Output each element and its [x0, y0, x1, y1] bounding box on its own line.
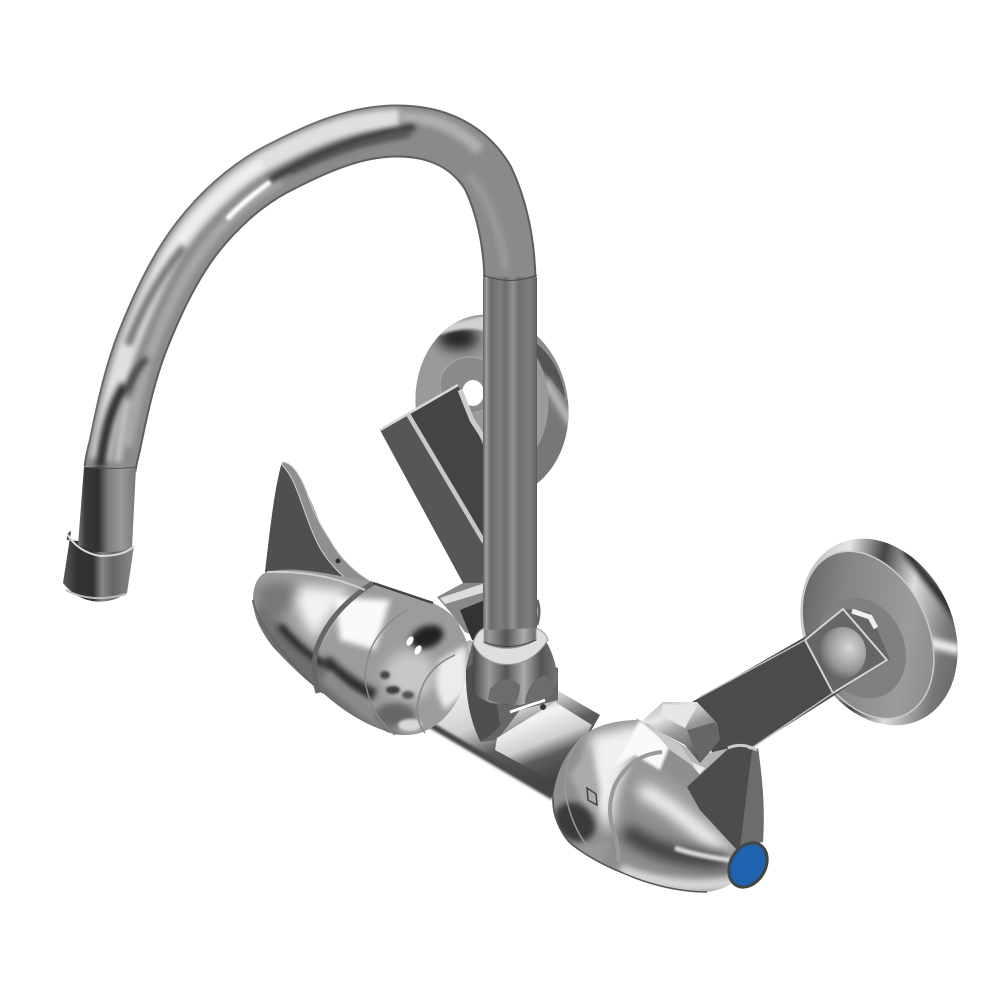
right wall flange — [800, 538, 958, 726]
left lever handle — [265, 462, 375, 590]
right valve neck under nut — [636, 718, 730, 795]
right valve hex nut — [643, 702, 720, 768]
right mounting arm — [692, 609, 890, 760]
centre tee fitting — [466, 640, 592, 785]
left valve body — [252, 570, 470, 736]
main body tube — [417, 640, 600, 797]
spout lower section — [67, 467, 136, 556]
spout nozzle — [63, 531, 134, 602]
right valve body — [547, 720, 740, 892]
rear mounting bracket — [380, 385, 485, 585]
spout — [100, 117, 510, 469]
rear hex nut behind riser — [437, 583, 485, 640]
rear wall flange — [415, 314, 569, 484]
right lever handle — [687, 745, 764, 850]
vertical riser — [483, 275, 539, 642]
riser collar — [472, 628, 558, 705]
illustration: chrome wall-mounted faucet — [63, 104, 958, 893]
icon: blue cold-water indicator — [719, 834, 777, 896]
